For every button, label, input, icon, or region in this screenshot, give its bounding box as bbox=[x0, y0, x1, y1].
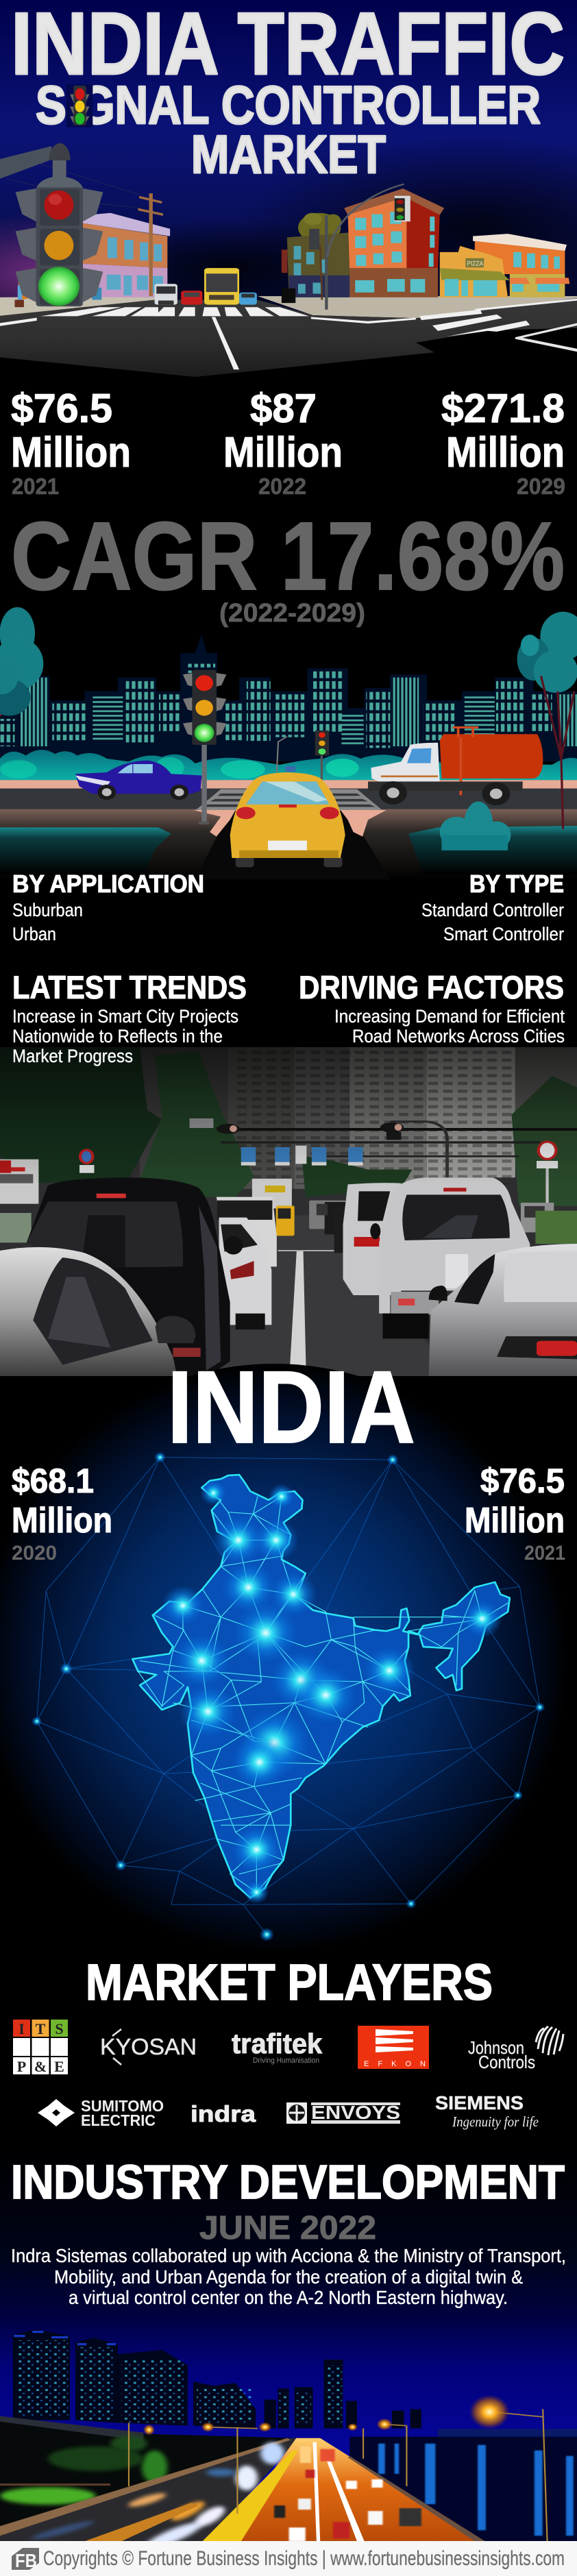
icon: large traffic light bbox=[0, 143, 103, 306]
logo: Johnson Controls bbox=[468, 2026, 563, 2072]
white truck bbox=[217, 1197, 277, 1266]
night skyline bbox=[13, 2329, 421, 2429]
title: MARKET bbox=[191, 124, 386, 184]
market players heading: MARKET PLAYERS bbox=[86, 1954, 493, 2011]
development description: a virtual control center on the A-2 North Eastern highway. bbox=[69, 2287, 508, 2308]
white car foreground left bbox=[0, 1247, 201, 1377]
by application list: BY APPLICATION bbox=[12, 870, 204, 898]
by application list: Suburban bbox=[12, 900, 83, 920]
garbage truck bbox=[368, 727, 543, 805]
yellow taxi bbox=[230, 766, 345, 867]
stat: 2029 market size: 2029 bbox=[517, 474, 565, 499]
panel: highway night photo bbox=[0, 2145, 577, 2553]
stat: 2021 market size bbox=[11, 386, 131, 499]
stat: 2022 market size: $87 bbox=[250, 386, 317, 431]
latest trends text: Nationwide to Reflects in the bbox=[12, 1026, 223, 1046]
title bbox=[11, 0, 565, 184]
river and bridge bbox=[349, 2429, 577, 2541]
logo: ITS P&E: & bbox=[34, 2058, 47, 2075]
stat: India 2021: Million bbox=[465, 1501, 565, 1541]
street trees bbox=[0, 1047, 577, 1206]
by type list bbox=[421, 870, 564, 944]
street lamp with signal bbox=[309, 184, 410, 310]
white lane line bbox=[289, 1251, 306, 1377]
highway left carriageway bbox=[0, 2438, 299, 2553]
latest trends text: Increase in Smart City Projects bbox=[12, 1006, 238, 1027]
logo: Sumitomo Electric: SUMITOMO bbox=[81, 2097, 164, 2115]
tan building and tree bbox=[282, 213, 349, 299]
stat: India 2020: 2020 bbox=[12, 1542, 57, 1565]
white car foreground right bbox=[429, 1244, 577, 1377]
logo: trafitek: trafitek bbox=[232, 2028, 322, 2059]
logo: Siemens: Ingenuity for life bbox=[452, 2113, 539, 2130]
logo: Sumitomo Electric: ELECTRIC bbox=[81, 2111, 156, 2129]
stat: 2021 market size: Million bbox=[11, 429, 131, 476]
city skyline bbox=[0, 635, 577, 761]
left shop bbox=[0, 1160, 38, 1242]
stat: India 2021 bbox=[465, 1462, 565, 1565]
stat: 2022 market size: Million bbox=[223, 429, 343, 476]
teal bushes bbox=[0, 750, 577, 780]
right tree bbox=[517, 612, 577, 829]
silver small van bbox=[343, 1183, 401, 1295]
logo: Envoys bbox=[286, 2102, 400, 2124]
logo: ITS P&E: P bbox=[17, 2058, 26, 2075]
logo: Siemens bbox=[435, 2092, 539, 2130]
logo: ITS P&E: T bbox=[36, 2020, 46, 2037]
pedestrian bbox=[14, 280, 28, 307]
footer bar bbox=[0, 2541, 577, 2576]
logo: Johnson Controls: Johnson bbox=[468, 2037, 524, 2058]
black van bbox=[27, 1177, 230, 1377]
background buildings bbox=[140, 1047, 577, 1189]
pizza shops bbox=[440, 234, 569, 297]
logo: ITS P&E bbox=[13, 2020, 68, 2075]
photo top darkening bbox=[0, 1047, 577, 1184]
left tree bbox=[0, 607, 43, 715]
panel: city street illustration bbox=[0, 607, 577, 881]
icon: traffic light replacing letter I bbox=[66, 84, 93, 127]
utility pole bbox=[8, 164, 163, 296]
logo: Siemens: SIEMENS bbox=[435, 2092, 524, 2113]
development description bbox=[11, 2245, 566, 2308]
logo: Envoys: ENVOYS bbox=[311, 2102, 400, 2123]
distant small traffic light bbox=[277, 731, 329, 779]
logo: ITS P&E: S bbox=[55, 2020, 64, 2037]
outer network lines bbox=[37, 1458, 540, 1935]
stat: 2022 market size bbox=[223, 386, 343, 499]
logo: Sumitomo Electric bbox=[38, 2097, 164, 2129]
panel: traffic jam photo bbox=[0, 1047, 577, 1377]
stat: India 2020 bbox=[12, 1462, 112, 1565]
stat: 2029 market size: $271.8 bbox=[441, 386, 565, 431]
logo: ITS P&E: I bbox=[19, 2020, 25, 2037]
logo: Johnson Controls: Controls bbox=[478, 2052, 535, 2072]
logo: trafitek: Driving Humanisation bbox=[253, 2057, 319, 2065]
stat: 2029 market size bbox=[441, 386, 565, 499]
logo: Kyosan: KYOSAN bbox=[100, 2034, 197, 2059]
logo: Efkon: EFKON bbox=[364, 2060, 426, 2068]
stat: India 2021: $76.5 bbox=[480, 1462, 565, 1500]
logo: Efkon bbox=[358, 2026, 429, 2069]
road and crosswalk bbox=[0, 296, 577, 377]
logo: Indra: indra bbox=[191, 2101, 256, 2126]
by application list bbox=[12, 870, 204, 944]
pizza sign: PIZZA bbox=[467, 260, 483, 267]
driving factors text bbox=[299, 969, 565, 1046]
CAGR callout: (2022-2029) bbox=[219, 599, 365, 628]
development description: Mobility, and Urban Agenda for the creation of a digital twin & bbox=[54, 2266, 523, 2287]
silver van bbox=[370, 1177, 530, 1338]
logo: ITS P&E: E bbox=[54, 2058, 64, 2075]
stat: 2029 market size: Million bbox=[446, 429, 565, 476]
bush bbox=[440, 801, 511, 850]
latest trends text bbox=[12, 969, 247, 1066]
embankment and greenery bbox=[0, 2416, 295, 2530]
highway right carriageway bbox=[202, 2438, 485, 2541]
glowing nodes on map bbox=[32, 1451, 545, 1941]
panel: India map network bbox=[0, 1364, 577, 1953]
date: JUNE 2022 bbox=[199, 2210, 376, 2246]
by type list: BY TYPE bbox=[469, 870, 564, 898]
road surface bbox=[191, 1215, 456, 1377]
latest trends text: Market Progress bbox=[12, 1046, 133, 1066]
vehicles in distance bbox=[155, 268, 295, 305]
panel: header street scene bbox=[0, 0, 577, 377]
map of India bbox=[132, 1475, 510, 1898]
India heading: INDIA bbox=[167, 1349, 415, 1464]
stat: 2022 market size: 2022 bbox=[258, 474, 306, 499]
left building bbox=[83, 213, 170, 299]
main traffic light bbox=[183, 670, 226, 824]
by application list: Urban bbox=[12, 924, 56, 944]
logo: Kyosan bbox=[100, 2029, 197, 2065]
white sedan bbox=[219, 1218, 271, 1329]
stat: 2021 market size: $76.5 bbox=[11, 386, 112, 431]
distant traffic bbox=[252, 1179, 577, 1253]
latest trends text: LATEST TRENDS bbox=[12, 969, 247, 1005]
street lamps bbox=[129, 2395, 548, 2541]
icon: Fortune Business Insights logo: FB bbox=[15, 2550, 37, 2571]
stat: India 2020: $68.1 bbox=[12, 1462, 94, 1500]
signal gantry and road signs bbox=[79, 1118, 577, 1205]
stat: 2021 market size: 2021 bbox=[12, 474, 59, 499]
blue car bbox=[75, 761, 201, 800]
stat: India 2020: Million bbox=[12, 1501, 112, 1541]
stat: India 2021: 2021 bbox=[524, 1542, 565, 1565]
right red building bbox=[344, 188, 444, 297]
by type list: Smart Controller bbox=[443, 924, 564, 944]
